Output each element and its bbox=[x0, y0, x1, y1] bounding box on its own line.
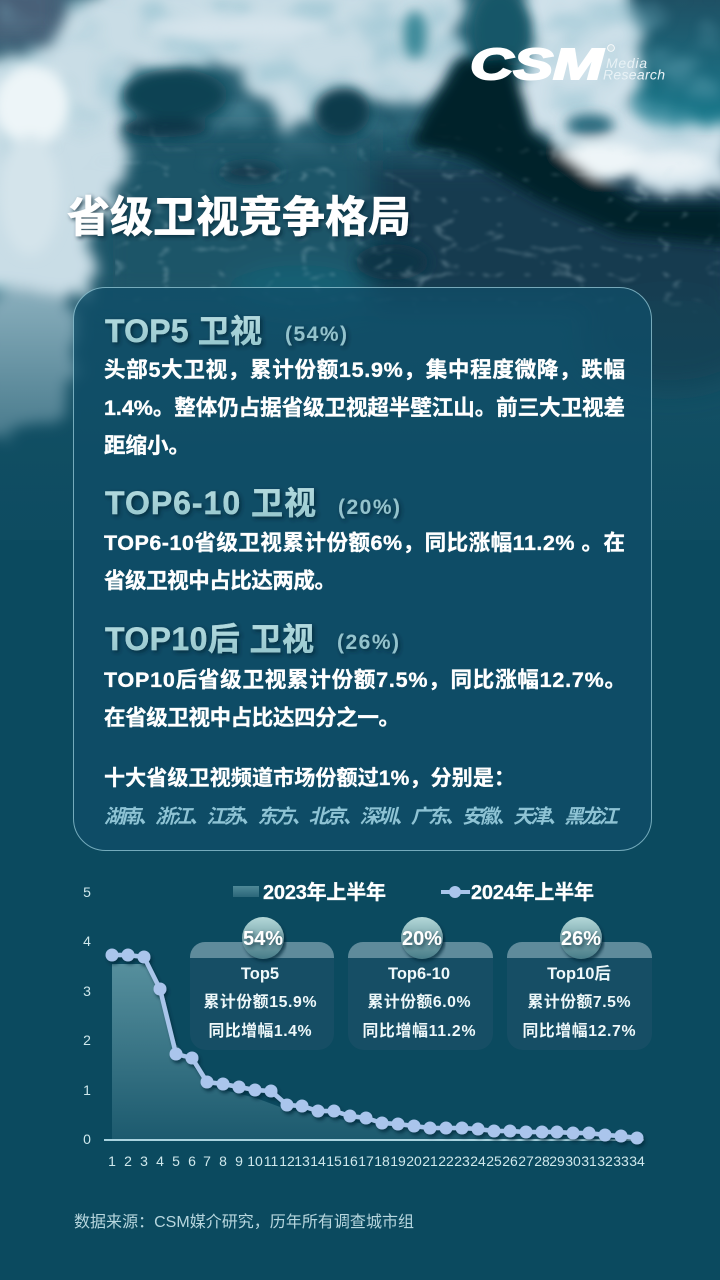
x axis line bbox=[104, 1139, 644, 1141]
x axis labels: 9 bbox=[235, 1153, 243, 1169]
x axis labels: 27 bbox=[518, 1153, 534, 1169]
waterfall at right bbox=[630, 0, 720, 135]
x axis labels: 17 bbox=[358, 1153, 374, 1169]
x axis labels: 7 bbox=[203, 1153, 211, 1169]
card: Top5: 同比增幅1.4% bbox=[208, 1022, 312, 1040]
x axis labels: 13 bbox=[294, 1153, 310, 1169]
heading: TOP10后: (26%) bbox=[337, 631, 399, 654]
card: Top6-10: 累计份额6.0% bbox=[368, 993, 470, 1011]
x axis labels: 10 bbox=[247, 1153, 263, 1169]
y axis labels bbox=[83, 884, 91, 1147]
card: Top6-10: 同比增幅11.2% bbox=[362, 1022, 476, 1040]
text: TOP5 body: 头部5大卫视，累计份额15.9%，集中程度微降，跌幅 bbox=[104, 358, 625, 382]
x axis labels: 8 bbox=[219, 1153, 227, 1169]
title: 省级卫视竞争格局 bbox=[67, 194, 411, 242]
panel: share summary bbox=[74, 288, 652, 850]
x axis labels: 4 bbox=[156, 1153, 164, 1169]
water texture bbox=[115, 136, 720, 306]
foam mottling bbox=[0, 0, 720, 156]
card: Top5: Top5 bbox=[241, 965, 279, 983]
y axis labels: 0 bbox=[83, 1131, 91, 1147]
text: TOP10后 body: 在省级卫视中占比达四分之一。 bbox=[104, 705, 400, 730]
badge: 54%: 54% bbox=[243, 928, 283, 950]
text: TOP6-10 body: TOP6-10省级卫视累计份额6%，同比涨幅11.2% 。在 bbox=[104, 531, 625, 555]
heading: TOP5: TOP5 卫视 bbox=[105, 313, 262, 349]
text: TOP6-10 body: 省级卫视中占比达两成。 bbox=[104, 569, 336, 593]
chart: channel share curve bbox=[83, 884, 645, 1169]
logo: CSM Media Research bbox=[470, 40, 665, 89]
area: 2023 first half bbox=[112, 964, 638, 1140]
text: TOP5 body: 距缩小。 bbox=[104, 433, 190, 458]
x axis labels: 14 bbox=[310, 1153, 326, 1169]
logo: CSM Media Research: Research bbox=[603, 66, 665, 82]
legend: 2023 first half: 2023年上半年 bbox=[263, 881, 386, 904]
x axis labels: 24 bbox=[470, 1153, 486, 1169]
text: TOP5 body: 1.4%。整体仍占据省级卫视超半壁江山。前三大卫视差 bbox=[104, 396, 625, 420]
x axis labels: 16 bbox=[342, 1153, 358, 1169]
line: 2024 first half bbox=[106, 948, 644, 1144]
card: Top6-10: Top6-10 bbox=[388, 965, 450, 983]
x axis labels: 34 bbox=[629, 1153, 645, 1169]
x axis labels: 28 bbox=[534, 1153, 550, 1169]
x axis labels bbox=[108, 1153, 645, 1169]
heading: TOP5: (54%) bbox=[285, 323, 347, 346]
badge: 20%: 20% bbox=[402, 928, 442, 950]
text: top ten channels lead-in: 十大省级卫视频道市场份额过1%，分别是： bbox=[104, 766, 515, 790]
badge: 54% bbox=[242, 917, 284, 959]
legend: 2024 first half: 2024年上半年 bbox=[471, 881, 594, 904]
heading: TOP5 bbox=[105, 313, 347, 349]
x axis labels: 23 bbox=[454, 1153, 470, 1169]
x axis labels: 26 bbox=[502, 1153, 518, 1169]
x axis labels: 2 bbox=[124, 1153, 132, 1169]
heading: TOP6-10: (20%) bbox=[338, 496, 400, 519]
x axis labels: 6 bbox=[188, 1153, 196, 1169]
card: Top10后: 累计份额7.5% bbox=[528, 993, 630, 1011]
y axis labels: 2 bbox=[83, 1032, 91, 1048]
x axis labels: 30 bbox=[565, 1153, 581, 1169]
y axis labels: 3 bbox=[83, 983, 91, 999]
badge: 26% bbox=[560, 917, 602, 959]
x axis labels: 12 bbox=[279, 1153, 295, 1169]
y axis labels: 5 bbox=[83, 884, 91, 900]
logo: CSM Media Research: Media bbox=[606, 55, 647, 71]
card: Top5: 累计份额15.9% bbox=[204, 993, 316, 1011]
x axis labels: 1 bbox=[108, 1153, 116, 1169]
source note: 数据来源：CSM媒介研究，历年所有调查城市组 bbox=[74, 1213, 414, 1231]
text: TOP6-10 body bbox=[104, 531, 625, 593]
card: Top6-10 bbox=[348, 917, 493, 1050]
card: Top10后: Top10后 bbox=[547, 964, 611, 983]
background: stormy ocean wave bbox=[0, 0, 720, 450]
card: Top10后 bbox=[507, 917, 652, 1050]
x axis labels: 11 bbox=[264, 1153, 278, 1169]
text: top ten channel names: 湖南、浙江、江苏、东方、北京、深圳、广东、安徽、天津、黑龙江 bbox=[104, 806, 620, 828]
x axis labels: 31 bbox=[581, 1153, 597, 1169]
card: Top5 bbox=[190, 917, 334, 1050]
x axis labels: 5 bbox=[172, 1153, 180, 1169]
x axis labels: 32 bbox=[597, 1153, 613, 1169]
x axis labels: 3 bbox=[140, 1153, 148, 1169]
x axis labels: 33 bbox=[613, 1153, 629, 1169]
heading: TOP6-10: TOP6-10 卫视 bbox=[105, 485, 316, 521]
x axis labels: 22 bbox=[438, 1153, 454, 1169]
x axis labels: 15 bbox=[326, 1153, 342, 1169]
card: Top10后: 同比增幅12.7% bbox=[522, 1022, 636, 1040]
badge: 20% bbox=[401, 917, 443, 959]
text: TOP10后 body bbox=[104, 668, 626, 730]
x axis labels: 18 bbox=[374, 1153, 390, 1169]
legend bbox=[233, 881, 594, 904]
x axis labels: 29 bbox=[549, 1153, 565, 1169]
badge: 26%: 26% bbox=[561, 928, 601, 950]
x axis labels: 25 bbox=[486, 1153, 502, 1169]
y axis labels: 4 bbox=[83, 933, 91, 949]
x axis labels: 21 bbox=[422, 1153, 438, 1169]
x axis labels: 19 bbox=[390, 1153, 406, 1169]
y axis labels: 1 bbox=[83, 1082, 91, 1098]
logo: CSM Media Research: CSM bbox=[470, 40, 605, 89]
heading: TOP10后: TOP10后 卫视 bbox=[105, 621, 314, 657]
text: TOP5 body bbox=[104, 358, 625, 458]
x axis labels: 20 bbox=[406, 1153, 422, 1169]
text: TOP10后 body: TOP10后省级卫视累计份额7.5%，同比涨幅12.7%。 bbox=[104, 668, 626, 692]
